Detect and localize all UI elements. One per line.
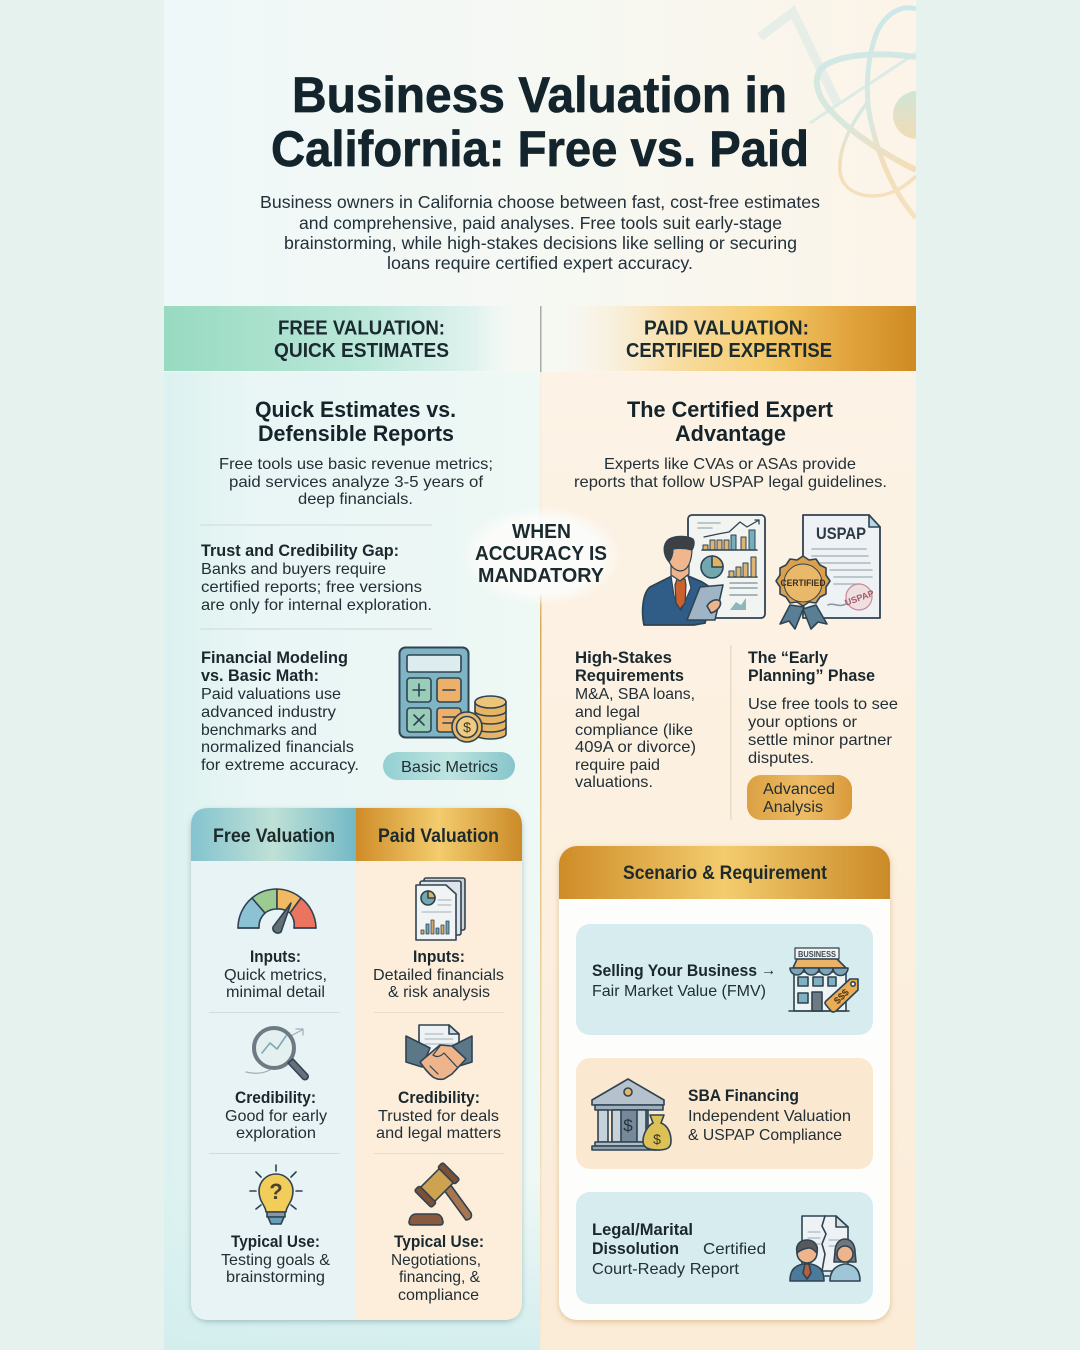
- text: paid credibility: [376, 1089, 501, 1142]
- intro text: brainstorming, while high-stakes decisions like selling or securing: [284, 233, 797, 253]
- icon: bank with money bag: $: [653, 1131, 661, 1147]
- text block: high-stakes requirements: 409A or divorce): [575, 739, 696, 756]
- icon: handshake over document: [406, 1025, 472, 1079]
- band: paid valuation: [564, 306, 916, 371]
- text block: trust and credibility gap: Banks and buyers require: [201, 561, 386, 578]
- text block: trust and credibility gap: [201, 542, 432, 614]
- text block: trust and credibility gap: are only for internal exploration.: [201, 597, 432, 614]
- panel: comparison table: [191, 808, 522, 1320]
- text block: trust and credibility gap: certified reports; free versions: [201, 579, 422, 596]
- intro text: [260, 192, 820, 273]
- text block: financial modeling: benchmarks and: [201, 722, 317, 739]
- icon: lightbulb with question mark: ?: [269, 1179, 283, 1204]
- panel: free column intro: [219, 397, 493, 508]
- text block: high-stakes requirements: compliance (like: [575, 722, 693, 739]
- text: paid inputs: Inputs:: [413, 948, 465, 966]
- intro text: and comprehensive, paid analyses. Free tools suit early-stage: [299, 213, 782, 233]
- text block: early planning phase: The “Early: [748, 649, 829, 667]
- text block: financial modeling: advanced industry: [201, 704, 336, 721]
- scenario card: legal and marital dissolution: Court-Ready Report: [592, 1261, 740, 1278]
- text block: financial modeling: for extreme accuracy.: [201, 757, 359, 774]
- scenario card: selling your business: →: [761, 962, 776, 979]
- band: free valuation: [164, 306, 516, 371]
- text: paid credibility: Credibility:: [398, 1089, 480, 1107]
- panel: free column intro: paid services analyze 3-5 years of: [229, 474, 484, 491]
- pill: basic metrics: [383, 752, 515, 780]
- table header: free valuation: Free Valuation: [213, 826, 335, 847]
- icon: gauge: [238, 889, 316, 933]
- panel: free column intro: Quick Estimates vs.: [255, 397, 456, 422]
- text block: early planning phase: disputes.: [748, 750, 814, 767]
- text block: high-stakes requirements: High-Stakes: [575, 649, 672, 667]
- icon: storefront with price tag: [789, 948, 858, 1012]
- icon: financial documents: [416, 878, 465, 940]
- callout: when accuracy is mandatory: MANDATORY: [478, 565, 605, 587]
- icon: calculator and coins: [400, 648, 506, 742]
- text block: financial modeling: normalized financials: [201, 739, 354, 756]
- text block: financial modeling: [201, 649, 359, 774]
- text block: financial modeling: Paid valuations use: [201, 686, 341, 703]
- text block: high-stakes requirements: [575, 649, 696, 791]
- panel: paid column intro: Experts like CVAs or ASAs provide: [604, 456, 856, 473]
- text block: early planning phase: Planning” Phase: [748, 667, 875, 685]
- text: free typical use: [221, 1233, 330, 1286]
- icon: calculator and coins: $: [463, 719, 471, 735]
- text: paid typical use: [391, 1233, 484, 1304]
- band: paid valuation: PAID VALUATION:: [644, 318, 809, 340]
- callout: when accuracy is mandatory: ACCURACY IS: [475, 543, 607, 565]
- icon: USPAP document with certified badge: [776, 515, 880, 629]
- icon: USPAP document with certified badge: USPAP: [843, 588, 875, 608]
- text block: early planning phase: settle minor partner: [748, 732, 893, 749]
- text block: high-stakes requirements: Requirements: [575, 667, 684, 685]
- icon: USPAP document with certified badge: CERTIFIED: [780, 578, 826, 588]
- text block: high-stakes requirements: require paid: [575, 757, 660, 774]
- panel: paid column intro: The Certified Expert: [627, 397, 834, 422]
- text: paid typical use: Typical Use:: [394, 1233, 484, 1251]
- pill: advanced analysis: Advanced: [763, 781, 835, 798]
- pill: advanced analysis: [747, 775, 852, 820]
- band: free valuation: QUICK ESTIMATES: [274, 340, 449, 362]
- text: free credibility: Credibility:: [235, 1089, 316, 1107]
- icon: gavel: [409, 1162, 471, 1225]
- intro text: Business owners in California choose between fast, cost-free estimates: [260, 192, 820, 212]
- text block: high-stakes requirements: valuations.: [575, 774, 653, 791]
- icon: analyst with report: [643, 515, 765, 625]
- scenario card: legal and marital dissolution: [576, 1192, 873, 1304]
- panel: free column intro: deep financials.: [298, 491, 413, 508]
- text block: early planning phase: Use free tools to see: [748, 696, 898, 713]
- icon: bank with money bag: [592, 1079, 671, 1150]
- text: free credibility: [225, 1089, 327, 1142]
- panel: paid column intro: Advantage: [675, 421, 786, 446]
- text: free inputs: [224, 948, 327, 1001]
- scenario card: SBA financing: SBA Financing: [688, 1087, 799, 1105]
- text: paid typical use: Negotiations,: [391, 1252, 481, 1269]
- title: California: Free vs. Paid: [271, 121, 809, 177]
- infographic page: [164, 0, 916, 1350]
- panel: free column intro: Defensible Reports: [258, 421, 454, 446]
- scenario card: selling your business: Selling Your Business: [592, 962, 757, 980]
- text: free typical use: Testing goals &: [221, 1252, 330, 1269]
- icon: USPAP document with certified badge: USPAP: [816, 524, 866, 543]
- panel: scenario and requirement: [559, 846, 890, 1320]
- text: free inputs: Inputs:: [250, 948, 301, 966]
- scenario card: SBA financing: Independent Valuation: [688, 1108, 851, 1125]
- panel: paid column intro: [574, 397, 887, 491]
- decorative atom swirl: [758, 5, 916, 220]
- scenario card: SBA financing: [576, 1058, 873, 1169]
- text: free typical use: brainstorming: [226, 1269, 325, 1286]
- text: free typical use: Typical Use:: [231, 1233, 320, 1251]
- text block: trust and credibility gap: Trust and Credibility Gap:: [201, 542, 399, 560]
- icon: torn document with two people: [790, 1216, 860, 1281]
- pill: basic metrics: Basic Metrics: [401, 759, 498, 776]
- band: paid valuation: CERTIFIED EXPERTISE: [626, 340, 832, 362]
- title: Business Valuation in: [292, 67, 787, 123]
- icon: storefront with price tag: $$$: [832, 987, 852, 1007]
- icon: lightbulb with question mark: [250, 1165, 302, 1224]
- text block: high-stakes requirements: M&A, SBA loans,: [575, 686, 695, 703]
- text block: financial modeling: vs. Basic Math:: [201, 667, 319, 685]
- icon: magnifier with trend line: [246, 1028, 308, 1080]
- text block: high-stakes requirements: and legal: [575, 704, 640, 721]
- text: free credibility: Good for early: [225, 1108, 327, 1125]
- callout: when accuracy is mandatory: [461, 506, 621, 606]
- panel: paid column intro: reports that follow USPAP legal guidelines.: [574, 474, 887, 491]
- text: paid credibility: and legal matters: [376, 1125, 501, 1142]
- scenario card: legal and marital dissolution: Legal/Marital: [592, 1221, 693, 1239]
- scenario card: legal and marital dissolution: Dissolution: [592, 1240, 679, 1258]
- scenario card: SBA financing: & USPAP Compliance: [688, 1127, 842, 1144]
- text block: early planning phase: [748, 649, 898, 767]
- text: free inputs: Quick metrics,: [224, 967, 327, 984]
- panel heading: Scenario & Requirement: [623, 863, 828, 884]
- title: [271, 67, 809, 177]
- text: paid credibility: Trusted for deals: [378, 1108, 499, 1125]
- icon: storefront with price tag: BUSINESS: [798, 949, 836, 959]
- scenario card: selling your business: Fair Market Value (FMV): [592, 983, 766, 1000]
- text: paid typical use: compliance: [398, 1287, 479, 1304]
- band: free valuation: FREE VALUATION:: [278, 318, 445, 340]
- icon: bank with money bag: $: [623, 1116, 633, 1135]
- scenario card: legal and marital dissolution: Certified: [703, 1241, 766, 1258]
- callout: when accuracy is mandatory: WHEN: [512, 521, 571, 543]
- pill: advanced analysis: Analysis: [763, 799, 823, 816]
- text: paid inputs: Detailed financials: [373, 967, 504, 984]
- intro text: loans require certified expert accuracy.: [387, 253, 693, 273]
- text: paid inputs: & risk analysis: [388, 984, 490, 1001]
- text: free credibility: exploration: [236, 1125, 316, 1142]
- panel: free column intro: Free tools use basic revenue metrics;: [219, 456, 493, 473]
- text: paid typical use: financing, &: [399, 1269, 480, 1286]
- table header: paid valuation: Paid Valuation: [378, 826, 499, 847]
- text block: early planning phase: your options or: [748, 714, 858, 731]
- text block: financial modeling: Financial Modeling: [201, 649, 348, 667]
- text: paid inputs: [373, 948, 504, 1001]
- text: free inputs: minimal detail: [226, 984, 325, 1001]
- scenario card: selling your business: [576, 924, 873, 1035]
